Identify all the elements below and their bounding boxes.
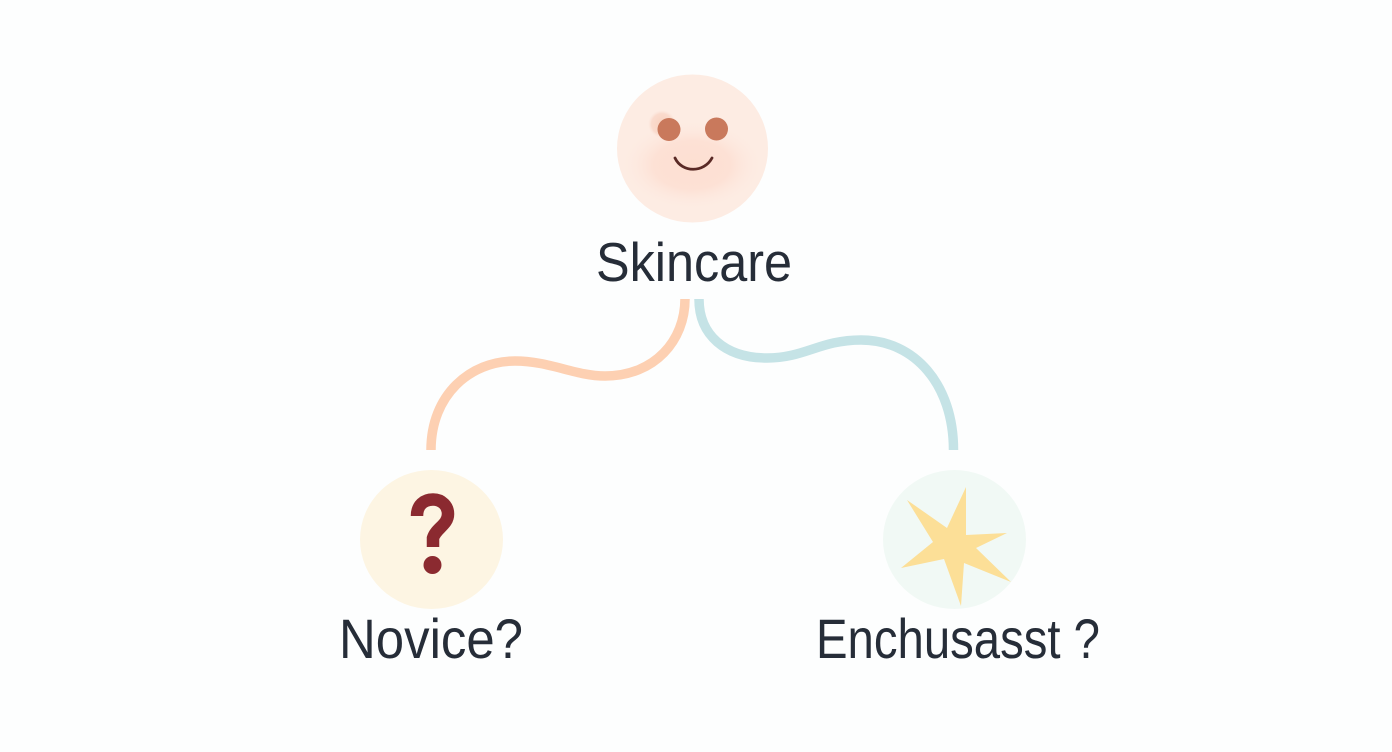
icon: question mark in cream circle xyxy=(360,470,503,609)
icon: yellow star in mint circle xyxy=(883,470,1026,609)
heading: Skincare: Skincare xyxy=(596,231,792,293)
label: Novice?: Novice? xyxy=(339,607,523,670)
connector: orange curve to Novice xyxy=(431,299,685,450)
icon: smiling face xyxy=(617,74,768,222)
connector: blue curve to Enthusiast xyxy=(699,299,954,450)
label: Enchusasst ?: Enchusasst ? xyxy=(816,607,1100,670)
